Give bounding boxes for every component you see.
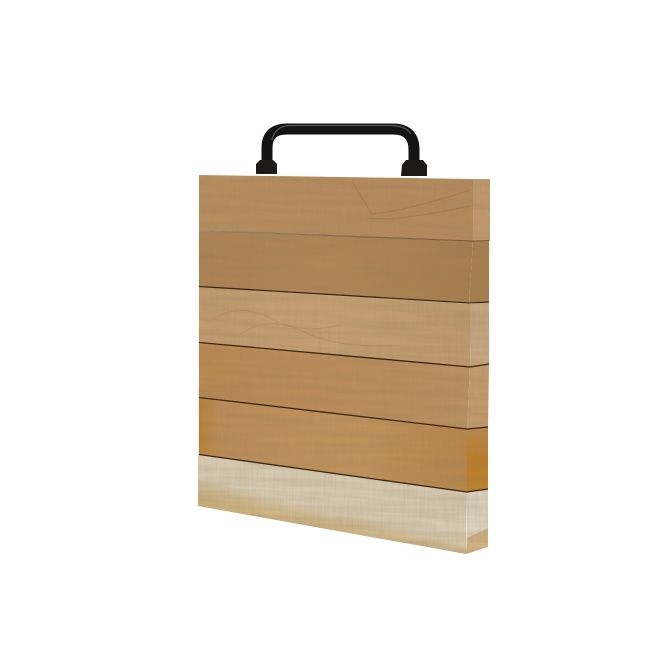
wood grain texture (198, 176, 490, 554)
handle (256, 126, 427, 176)
wood knot on plank 1 (352, 182, 470, 219)
plank 6: pale unfinished wood (198, 455, 488, 554)
right foot nut (401, 160, 427, 176)
handle tube (267, 129, 414, 162)
left foot nut (256, 160, 277, 174)
plank gaps (199, 230, 489, 492)
plank 2 (199, 231, 489, 303)
handle highlight (272, 126, 411, 140)
wood figure on plank 3 (205, 310, 400, 346)
plank 4 (199, 343, 489, 429)
plank 5 (199, 398, 488, 492)
illustration: wooden plank board with black handle (198, 124, 490, 554)
wooden board (198, 175, 490, 554)
plank 3 (199, 287, 489, 367)
plank 1 (199, 175, 490, 241)
